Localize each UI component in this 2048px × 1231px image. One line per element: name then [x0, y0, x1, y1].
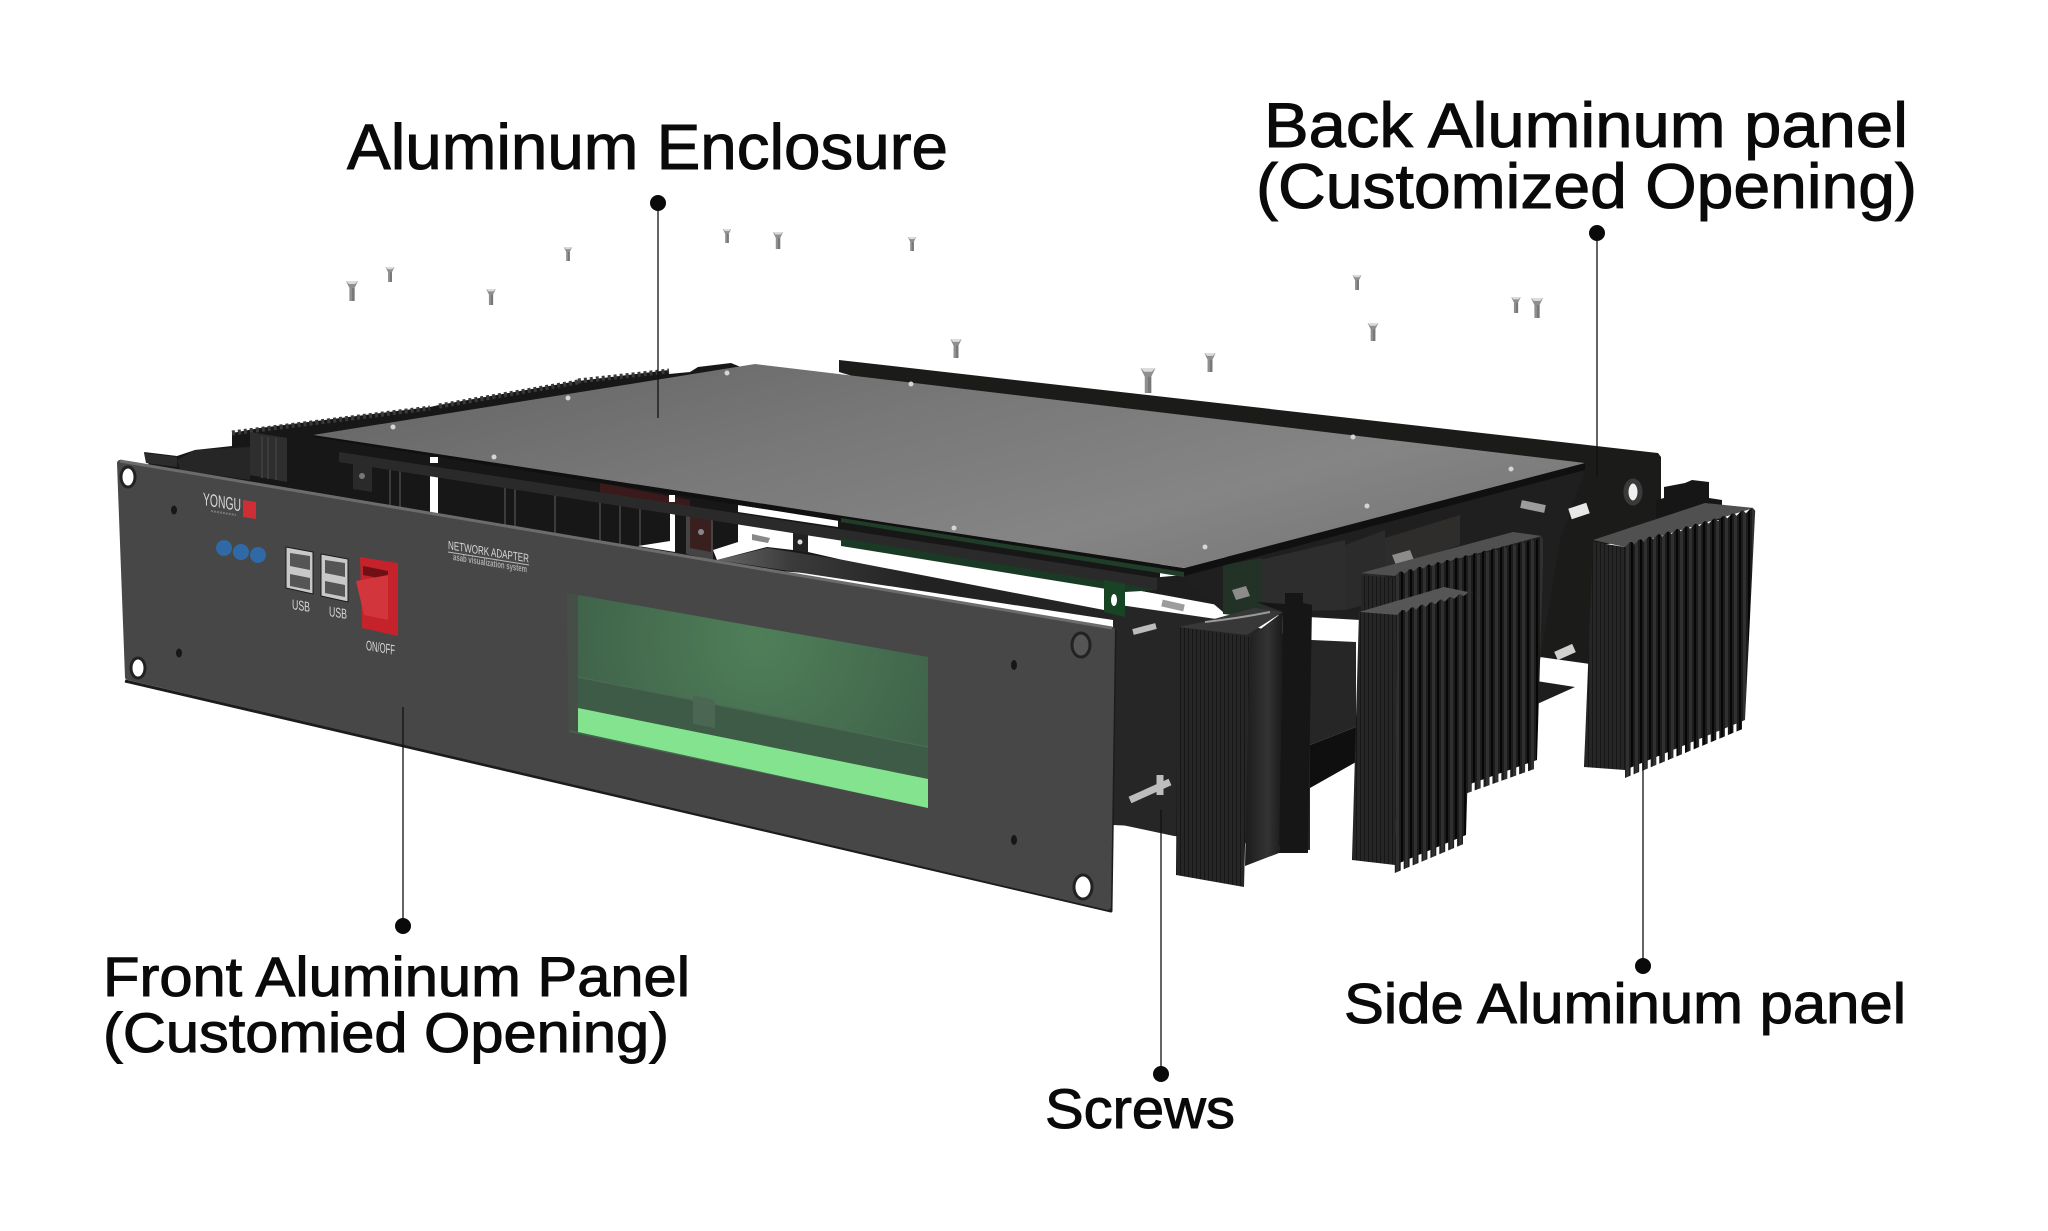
callout: front aluminum panel: Front Aluminum Panel [103, 945, 690, 1008]
green pcb bracket [1104, 580, 1125, 617]
callout: side aluminum panel: Side Aluminum panel [1344, 972, 1906, 1036]
product name [448, 538, 529, 575]
callout: screws: Screws [1045, 1077, 1235, 1140]
left interior heat-sink fins [144, 363, 1160, 600]
product name: asab visualization system [453, 552, 527, 575]
aluminum top plate [313, 364, 1585, 577]
blue buttons [216, 540, 266, 563]
panel screws [171, 506, 1017, 845]
usb labels: USB [292, 596, 310, 615]
brand logo: YONGU [203, 489, 241, 515]
rear right fin stub [1656, 480, 1722, 520]
icon: mounting hole on back panel [1626, 481, 1640, 503]
red power switch [356, 557, 398, 636]
callout: back aluminum panel: Back Aluminum panel [1264, 91, 1908, 161]
callout: back aluminum panel: (Customized Opening) [1256, 152, 1917, 222]
red tinted component strip [600, 483, 690, 510]
chassis tray [717, 548, 1575, 850]
back aluminum panel [839, 360, 1661, 664]
side panel: corner extrusion [1176, 593, 1312, 887]
side panel: front heat sink [1352, 587, 1473, 873]
side panel: middle heat sink [1361, 532, 1544, 819]
callout: side aluminum panel [1344, 763, 1906, 1036]
front aluminum panel [120, 461, 1115, 911]
callout: screws [1045, 810, 1235, 1140]
green display window [567, 593, 928, 808]
right electronics under the plate [1125, 470, 1588, 660]
front aluminum panel: USB [329, 603, 347, 622]
flying screws [346, 229, 1543, 393]
usb ports right [321, 554, 348, 602]
usb ports left [286, 547, 313, 594]
white gaps through the chassis [430, 457, 1360, 645]
icon: side screw [1162, 603, 1184, 608]
side panel: rear-right heat sink [1584, 503, 1755, 778]
icon: tray screw [1133, 626, 1156, 632]
callout: front aluminum panel: (Customied Opening) [103, 1001, 669, 1064]
plate screw dimples [390, 370, 1514, 550]
internal brackets and screws [686, 513, 808, 560]
callout: aluminum enclosure: Aluminum Enclosure [347, 111, 948, 183]
on/off label: ON/OFF [366, 637, 395, 658]
mounting holes [121, 467, 1092, 899]
under-plate rail [339, 452, 1157, 617]
product name: NETWORK ADAPTER [448, 538, 529, 566]
callout: aluminum enclosure [347, 111, 948, 418]
callout: back aluminum panel [1256, 91, 1917, 477]
callout: front aluminum panel [103, 707, 690, 1064]
icon: lower bolt [1130, 775, 1170, 800]
